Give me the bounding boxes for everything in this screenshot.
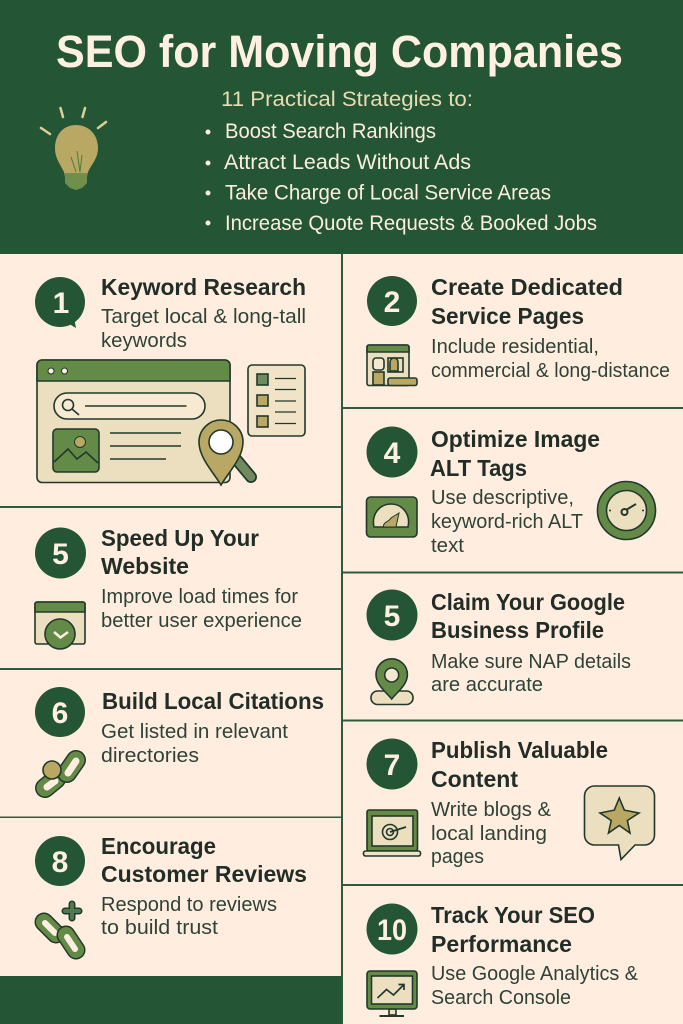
- number badge 6: [35, 687, 85, 737]
- number badge 10: 10: [377, 914, 407, 947]
- number badge 5: [35, 528, 86, 578]
- description: Get listed in relevant: [101, 721, 288, 743]
- number badge 5: 5: [52, 538, 69, 571]
- icon: map pin: [371, 659, 413, 704]
- header panel: [0, 0, 683, 254]
- bullet list: Increase Quote Requests & Booked Jobs: [225, 212, 597, 235]
- icon: monitor with growth chart: [367, 971, 417, 1016]
- description: Use Google Analytics &: [431, 963, 639, 985]
- heading: Service Pages: [431, 303, 584, 329]
- panel: 10 track your seo performance: [343, 885, 683, 1024]
- description: keyword-rich ALT: [431, 511, 583, 533]
- icon: browser window with search: [37, 360, 251, 485]
- icon: star speech bubble: [584, 786, 654, 860]
- description: [101, 721, 288, 767]
- number badge 4: 4: [384, 437, 401, 470]
- heading: Publish Valuable: [431, 737, 608, 763]
- icon: checklist: [248, 365, 305, 436]
- description: Write blogs &: [431, 799, 552, 821]
- icon: laptop with target: [364, 810, 420, 856]
- description: [101, 306, 306, 352]
- description: [101, 586, 302, 632]
- description: commercial & long-distance: [431, 360, 670, 382]
- heading: [431, 737, 608, 792]
- description: better user experience: [101, 610, 302, 632]
- bullet list: Boost Search Rankings: [225, 120, 436, 143]
- description: text: [431, 535, 464, 557]
- heading: Track Your SEO: [431, 902, 595, 928]
- number badge 7: [366, 738, 418, 790]
- bullet list: Attract Leads Without Ads: [224, 151, 471, 174]
- description: Improve load times for: [101, 586, 298, 608]
- heading: [430, 426, 600, 481]
- heading: Business Profile: [431, 617, 604, 643]
- heading: Create Dedicated: [431, 274, 623, 300]
- icon: image with gauge: [366, 497, 417, 537]
- subheading: 11 Practical Strategies to:: [221, 88, 473, 111]
- icon: chain link with gold ball: [43, 760, 76, 788]
- heading: Keyword Research: [101, 274, 306, 300]
- heading: [101, 525, 259, 579]
- description: [431, 799, 552, 868]
- heading: Website: [101, 553, 189, 579]
- description: [431, 963, 639, 1009]
- description: to build trust: [101, 917, 218, 939]
- heading: Speed Up Your: [101, 525, 259, 551]
- description: [101, 894, 277, 939]
- number badge 1: 1: [53, 287, 69, 320]
- heading: Content: [431, 766, 518, 792]
- number badge 4: [366, 426, 418, 478]
- heading: [101, 833, 307, 887]
- heading: Optimize Image: [431, 426, 600, 452]
- number badge 7: 7: [384, 749, 400, 782]
- number badge 5: 5: [384, 600, 400, 633]
- icon: speed gauge: [598, 482, 656, 540]
- number badge 8: [35, 836, 85, 886]
- panel: 5 speed up your website: [0, 507, 341, 669]
- icon: website with check: [35, 602, 85, 649]
- description: pages: [431, 846, 484, 868]
- description: Respond to reviews: [101, 894, 277, 916]
- heading: ALT Tags: [430, 455, 527, 481]
- icon: service page layout: [367, 345, 417, 386]
- title: SEO for Moving Companies: [56, 26, 623, 77]
- heading: Build Local Citations: [102, 688, 324, 714]
- number badge 10: [366, 904, 418, 954]
- description: keywords: [101, 330, 187, 352]
- description: Target local & long-tall: [101, 306, 306, 328]
- icon: chain link with plus: [44, 904, 79, 950]
- description: are accurate: [431, 674, 543, 696]
- heading: Claim Your Google: [431, 589, 625, 615]
- heading: [431, 589, 625, 643]
- panel: 4 optimize image alt tags: [343, 408, 683, 572]
- description: Make sure NAP details: [431, 651, 631, 673]
- description: Use descriptive,: [431, 487, 574, 509]
- description: [431, 487, 583, 557]
- bullet list: Take Charge of Local Service Areas: [225, 182, 551, 204]
- heading: Customer Reviews: [101, 861, 307, 887]
- panel: 2 create dedicated service pages: [343, 254, 683, 408]
- number badge 8: 8: [52, 846, 68, 879]
- description: local landing: [431, 823, 547, 845]
- description: directories: [101, 745, 199, 767]
- number badge 6: 6: [52, 697, 68, 730]
- number badge 1: [35, 277, 85, 328]
- panel: 5 claim your google business profile: [343, 572, 683, 720]
- panel: 1 keyword research: [0, 254, 341, 507]
- number badge 2: 2: [384, 286, 400, 319]
- panel: 6 build local citations: [0, 669, 341, 817]
- description: [431, 336, 670, 382]
- icon: light bulb: [41, 108, 106, 190]
- heading: Performance: [431, 931, 572, 957]
- panel: 7 publish valuable content: [343, 720, 683, 884]
- heading: [431, 274, 623, 329]
- heading: [431, 902, 595, 957]
- heading: Encourage: [101, 833, 216, 859]
- bullet list: [206, 120, 597, 235]
- description: Search Console: [431, 987, 571, 1009]
- panel: 8 encourage customer reviews: [0, 817, 341, 976]
- number badge 2: [367, 276, 417, 326]
- description: Include residential,: [431, 336, 599, 358]
- number badge 5: [366, 590, 418, 640]
- description: [431, 651, 631, 696]
